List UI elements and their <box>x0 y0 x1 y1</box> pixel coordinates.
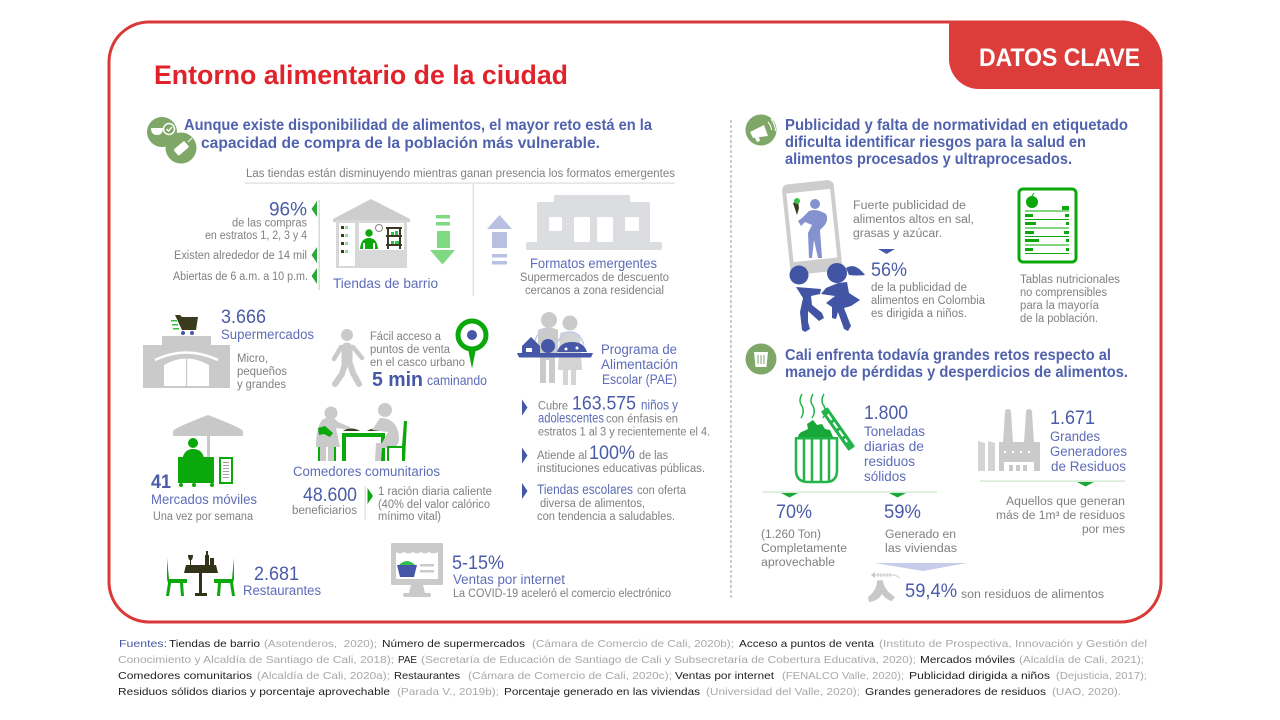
text block: sources: (FENALCO Valle, 2020); <box>782 670 904 682</box>
text block: ventas por internet: 5-15% <box>452 553 504 574</box>
text block: 70 percent: (1.260 Ton) <box>761 529 821 541</box>
text block: comedores comunitarios: 1 ración diaria caliente <box>378 486 492 498</box>
text block: ventas por internet: Ventas por internet <box>453 572 565 587</box>
text block: mercados moviles <box>151 472 257 523</box>
label: programa de alimentacion escolar: Alimentación <box>601 357 678 372</box>
text block: sources: Comedores comunitarios <box>118 670 252 682</box>
tab: datos clave <box>949 20 1162 89</box>
title: Entorno alimentario de la ciudad <box>154 60 568 90</box>
text block: advertising: alimentos altos en sal, <box>853 214 974 226</box>
text block: store stats <box>173 200 320 290</box>
text block: sources: Tiendas de barrio <box>169 638 260 650</box>
text block: large generators: Generadores <box>1050 444 1127 459</box>
list: PAE facts: 100% <box>589 443 635 464</box>
text block: sources: (Alcaldía de Cali, 2021); <box>1019 654 1144 666</box>
text block: store stats: Abiertas de 6 a.m. a 10 p.m. <box>173 271 308 283</box>
text block: sources: (Asotenderos, 2020); <box>264 638 377 650</box>
text block: formatos emergentes: Supermercados de descuento <box>520 272 669 284</box>
text block: generators definition: Aquellos que generan <box>1006 496 1125 508</box>
text block: access <box>370 331 487 391</box>
label: programa de alimentacion escolar: Programa de <box>601 342 677 357</box>
text block: sources: (Universidad del Valle, 2020); <box>706 686 860 698</box>
text block: store stats: en estratos 1, 2, 3 y 4 <box>205 230 308 242</box>
text block: store stats: de las compras <box>232 218 307 230</box>
text block: sources: Grandes generadores de residuos <box>865 686 1046 698</box>
text block: 1800 tons: sólidos <box>864 469 906 484</box>
text block: sources: Acceso a puntos de venta <box>739 638 874 650</box>
label: programa de alimentacion escolar <box>601 342 678 387</box>
text block: advertising: 56% <box>871 260 907 281</box>
text block: nutrition tables: de la población. <box>1020 313 1098 325</box>
text block: sources: Conocimiento y Alcaldía de Santiago de Cali, 2018); <box>118 654 394 666</box>
text block: comedores comunitarios: (40% del valor calórico <box>378 499 490 511</box>
text block: access: puntos de venta <box>370 344 451 356</box>
list: PAE facts: con oferta <box>637 485 687 497</box>
icon: walking person <box>334 329 362 384</box>
text block: large generators <box>1050 408 1127 474</box>
text block: sources: Restaurantes <box>394 670 460 682</box>
icon: food and price tag <box>147 117 196 164</box>
heading: availability: Aunque existe disponibilidad de alimentos, el mayor reto está en la <box>184 117 652 134</box>
list: PAE facts: adolescentes <box>538 410 604 426</box>
text block: access: 5 min <box>372 369 423 391</box>
icon: community kitchen <box>316 403 407 461</box>
icon: trash bin <box>746 344 776 374</box>
text block: large generators: 1.671 <box>1050 408 1095 429</box>
text block: supermercados <box>221 307 314 391</box>
heading: availability <box>184 117 652 152</box>
arrow: stores decreasing <box>430 215 455 264</box>
icon: restaurant table <box>166 551 235 596</box>
text block: sources: (Instituto de Prospectiva, Innovación y Gestión del <box>879 638 1147 650</box>
text block: 1800 tons: 1.800 <box>864 403 908 424</box>
text block: restaurantes: 2.681 <box>254 564 299 585</box>
heading: advertising: alimentos procesados y ultraprocesados. <box>785 151 1072 168</box>
text block: sources: Porcentaje generado en las viviendas <box>504 686 700 698</box>
text block: large generators: Grandes <box>1050 429 1100 444</box>
text block: 1800 tons: diarias de <box>864 439 924 454</box>
icon: online shop monitor <box>391 543 443 597</box>
text block: 70 percent: Completamente <box>761 543 847 555</box>
list: PAE facts: con énfasis en <box>606 414 678 426</box>
text block: comedores comunitarios: mínimo vital) <box>378 511 441 523</box>
text block: 59.4 percent: 59,4% <box>905 581 957 602</box>
subheading: stores trend: Las tiendas están disminuyendo mientras ganan presencia los formatos emergentes <box>246 168 675 180</box>
heading: availability: capacidad de compra de la población más vulnerable. <box>201 135 600 152</box>
text block: sources: Número de supermercados <box>382 638 525 650</box>
text block: supermercados: Micro, <box>237 353 268 365</box>
text block: restaurantes: Restaurantes <box>243 583 321 598</box>
text block: advertising: es dirigida a niños. <box>871 308 967 320</box>
text block: sources: Residuos sólidos diarios y porcentaje aprovechable <box>118 686 390 698</box>
icon: location pin <box>458 321 486 368</box>
text block: advertising: de la publicidad de <box>871 282 967 294</box>
text block: formatos emergentes: cercanos a zona residencial <box>525 285 664 297</box>
text block: generators definition: por mes <box>1082 524 1125 536</box>
text block: formatos emergentes: Formatos emergentes <box>530 256 657 271</box>
icon: factory <box>978 409 1040 471</box>
arrow: emerging formats increasing <box>487 215 512 264</box>
list: PAE facts: estratos 1 al 3 y recientemente el 4. <box>538 426 710 438</box>
icon: supermarket <box>143 315 230 388</box>
text block: 59.4 percent <box>905 581 1104 602</box>
text block: store stats: 96% <box>269 200 307 220</box>
marker: light triangle <box>875 563 967 571</box>
list: PAE facts: 163.575 <box>572 394 636 414</box>
text block: generators definition <box>996 496 1125 536</box>
text block: comedores comunitarios: Comedores comunitarios <box>293 464 440 479</box>
list: PAE facts: con tendencia a saludables. <box>537 511 675 523</box>
text block: nutrition tables <box>1020 274 1120 325</box>
text block: sources: Fuentes: <box>119 638 167 650</box>
icon: neighborhood store <box>333 199 410 268</box>
text block: comedores comunitarios: beneficiarios <box>292 505 357 517</box>
text block: sources: (Dejusticia, 2017); <box>1056 670 1147 682</box>
heading: advertising: Publicidad y falta de normatividad en etiquetado <box>785 117 1128 134</box>
text block: access: caminando <box>427 373 487 388</box>
list: PAE facts <box>522 394 710 523</box>
icon: school feeding family <box>517 312 593 385</box>
text block: sources: (UAO, 2020). <box>1052 686 1121 698</box>
list: PAE facts: diversa de alimentos, <box>540 498 645 510</box>
marker: generators triangle <box>1077 482 1094 486</box>
text block: 59 percent: las viviendas <box>885 543 957 555</box>
text block: 59 percent <box>884 502 957 555</box>
text block: sources: PAE <box>398 654 417 666</box>
text block: access: Fácil acceso a <box>370 331 442 343</box>
text block: sources <box>118 638 1147 698</box>
text block: sources: (Secretaría de Educación de Santiago de Cali y Subsecretaría de Cobertura Educativa, 2020); <box>421 654 916 666</box>
text block: 1800 tons <box>864 403 925 484</box>
text block: restaurantes <box>243 564 321 598</box>
text block: mercados moviles: Mercados móviles <box>151 492 257 507</box>
text block: supermercados: 3.666 <box>221 307 266 328</box>
panel: red frame <box>109 22 1161 622</box>
heading: advertising: dificulta identificar riesgos para la salud en <box>785 134 1086 151</box>
text block: 70 percent: aprovechable <box>761 557 835 569</box>
icon: mobile market <box>173 415 243 487</box>
icon: megaphone <box>746 114 776 146</box>
list: PAE facts: Tiendas escolares <box>537 482 633 497</box>
text block: advertising <box>853 200 986 320</box>
text block: formatos emergentes <box>520 256 669 297</box>
text block: nutrition tables: no comprensibles <box>1020 287 1107 299</box>
text block: 70 percent <box>761 502 847 569</box>
text block: 59.4 percent: son residuos de alimentos <box>961 589 1104 601</box>
text block: mercados moviles: 41 <box>151 472 171 493</box>
text block: sources: Mercados móviles <box>920 654 1015 666</box>
text block: 1800 tons: residuos <box>864 454 915 469</box>
text block: mercados moviles: Una vez por semana <box>153 511 254 523</box>
text block: comedores comunitarios: 48.600 <box>303 485 357 506</box>
icon: nutrition label <box>1019 189 1076 262</box>
markers: split triangles <box>781 493 906 498</box>
list: PAE facts: Atiende al <box>537 450 587 462</box>
icon: phone and children <box>781 180 865 332</box>
text block: large generators: de Residuos <box>1051 459 1126 474</box>
icon: discount supermarket building <box>526 195 662 250</box>
tab: datos clave: DATOS CLAVE <box>979 44 1140 72</box>
text block: 1800 tons: Toneladas <box>864 424 925 439</box>
list: PAE facts: de las <box>639 450 668 462</box>
heading: food waste <box>785 347 1128 381</box>
text block: 70 percent: 70% <box>776 502 812 523</box>
text block: access: en el casco urbano <box>370 357 465 369</box>
text block: 59 percent: Generado en <box>885 529 956 541</box>
text block: sources: (Alcaldía de Cali, 2020a); <box>257 670 390 682</box>
heading: advertising <box>785 117 1128 168</box>
text block: supermercados: Supermercados <box>221 327 314 342</box>
text block: advertising: grasas y azúcar. <box>853 228 942 240</box>
text block: advertising: alimentos en Colombia <box>871 295 986 307</box>
text block: advertising: Fuerte publicidad de <box>853 200 966 212</box>
text block: sources: (Parada V., 2019b); <box>397 686 499 698</box>
list: PAE facts: Cubre <box>538 400 568 412</box>
text block: ventas por internet <box>452 553 671 600</box>
list: PAE facts: instituciones educativas públicas. <box>537 463 705 475</box>
text block: supermercados: y grandes <box>237 379 286 391</box>
text block: sources: (Cámara de Comercio de Cali, 2020c); <box>468 670 672 682</box>
heading: food waste: Cali enfrenta todavía grandes retos respecto al <box>785 347 1111 364</box>
text block: supermercados: pequeños <box>237 366 287 378</box>
text block: comedores comunitarios <box>292 464 492 523</box>
list: PAE facts: niños y <box>641 398 678 412</box>
heading: food waste: manejo de pérdidas y desperdicios de alimentos. <box>785 364 1128 381</box>
text block: nutrition tables: para la mayoría <box>1020 300 1100 312</box>
text block: sources: Publicidad dirigida a niños <box>909 670 1050 682</box>
text block: store stats: Existen alrededor de 14 mil <box>174 250 307 262</box>
label: tiendas de barrio: Tiendas de barrio <box>333 276 438 291</box>
text block: sources: Ventas por internet <box>675 670 774 682</box>
icon: fishbone and banana peel <box>868 572 900 602</box>
text block: 59 percent: 59% <box>884 502 921 523</box>
text block: nutrition tables: Tablas nutricionales <box>1020 274 1120 286</box>
icon: waste container <box>795 394 855 482</box>
text block: generators definition: más de 1m³ de residuos <box>996 510 1125 522</box>
label: programa de alimentacion escolar: Escolar (PAE) <box>602 372 677 387</box>
text block: ventas por internet: La COVID-19 aceleró el comercio electrónico <box>453 588 671 600</box>
text block: sources: (Cámara de Comercio de Cali, 2020b); <box>532 638 734 650</box>
